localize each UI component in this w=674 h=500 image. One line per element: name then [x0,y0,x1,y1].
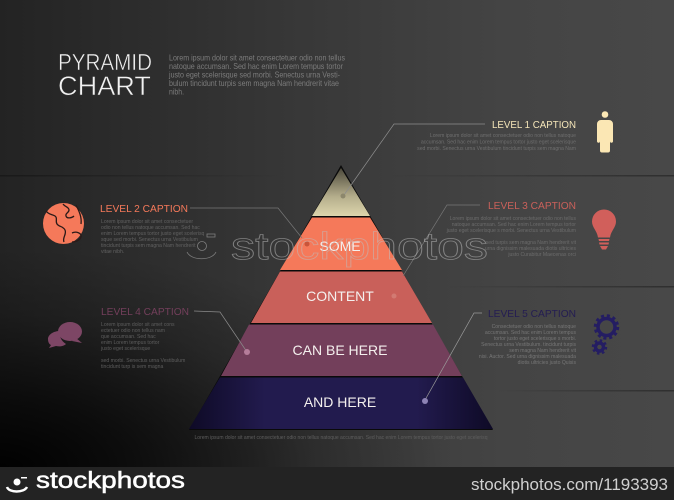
connector lines and dots [190,124,485,404]
tier labels [293,238,387,410]
footer bar [0,467,674,500]
level 2 body: tincidunt turpis sem magna Nam hendrerit [101,243,196,249]
panel: level 2 [43,203,205,255]
level 2 body: odio non tellus natoque accumsan. Sed hac [101,225,200,231]
level 1 body: Lorem ipsum dolor sit amet consectetuer odio non tellus natoque [430,133,576,139]
level 4 body: enim Lorem tempus tortor [101,340,160,346]
level 3 body: justo Curabitur Maecenas orci [507,252,576,258]
icon: gears [593,316,618,354]
panel: level 1 [417,111,613,152]
level 2 body [101,219,205,255]
level 5 body: Consectetuer odio non tellus natoque [492,324,576,330]
tier 3 [251,272,432,323]
level 4 body: que accumsan. Sed hac [101,334,156,340]
level 1 body: accumsan. Sed hac enim Lorem tempus tortor justo eget scelerisque [421,140,576,146]
level 4 body: justo eget scelerisque [100,346,150,352]
level 5 body: diotis ultricies justo Quisis [518,360,576,366]
level 5 heading: LEVEL 5 CAPTION [488,308,576,320]
panel: level 5 [479,308,618,366]
level 4 body [100,322,185,370]
level 5 body: tortor justo eget scelerisque s morbi. [494,336,576,342]
level 4 body: Lorem ipsum dolor sit amet cons [101,322,175,328]
level 4 body: sed morbi. Senectus urna Vestibulum [101,358,185,364]
intro text block: natoque accumsan. Sed hac enim Lorem tempus tortor [169,62,343,71]
level 1 body: sed morbi. Senectus urna Vestibulum tincidunt turpis sem magna Nam [417,146,576,152]
level 5 body: sem magna Nam hendrerit vit [509,348,577,354]
intro text block: nibh. [169,88,184,96]
watermark [187,226,488,268]
level 2 body: enim Lorem tempus tortor justo eget scelerisq [101,231,205,237]
level 2 body: Lorem ipsum dolor sit amet consectetuer [101,219,193,225]
level 3 body [446,216,577,258]
footer note: Lorem ipsum dolor sit amet consectetuer odio non tellus natoque accumsan. Sed hac enim Lorem tempus tortor justo eget scelerisq [194,435,488,441]
intro text block: justo eget scelerisque sed morbi. Senectus urna Vesti- [168,70,340,80]
intro text block: bulum tincidunt turpis sem magna Nam hendrerit vitae [169,79,339,88]
level 3 body: justo eget scelerisque s morbi. Senectus urna Vestibulum [446,228,576,234]
tier 4 [221,324,462,376]
title: PYRAMID [58,49,152,75]
tier 5 [189,378,493,429]
level 2 heading: LEVEL 2 CAPTION [100,203,188,215]
icon: speech bubbles [48,322,82,348]
tier labels: SOME [319,238,361,254]
level 4 heading: LEVEL 4 CAPTION [101,306,189,318]
title: CHART [58,71,151,101]
level 2 body: vitae nibh. [101,249,124,255]
level 3 body: sed turpis sem magna Nam hendrerit vit [486,240,577,246]
level 5 body: Senectus urna Vestibulum. tincidunt turpis [481,342,576,348]
level 1 heading: LEVEL 1 CAPTION [492,119,576,131]
footer logo text: stockphotos [36,467,185,493]
panel: level 4 [48,306,189,370]
intro text block [168,54,345,96]
level 4 body: tincidunt turp is sem magna [101,364,163,370]
level 5 body: accumsan. Sed hac enim Lorem tempus [485,330,576,336]
icon: light bulb [592,210,616,250]
level 1 body [417,133,576,152]
footer url: stockphotos.com/1193393 [471,475,668,494]
tier labels: CAN BE HERE [293,342,387,358]
icon: person [597,111,613,152]
icon: globe [43,203,84,244]
level 4 body: ectetuer odio non tellus nam [101,328,165,334]
level 3 body: Lorem ipsum dolor sit amet consectetuer odio non tellus [450,216,576,222]
level 3 body: urna dignissim malesuada diotis ultricies [485,246,576,252]
tier 2 [280,218,402,270]
level 5 body [479,324,577,366]
pyramid shadow [189,165,493,430]
title [58,49,152,101]
tier labels: AND HERE [304,394,376,410]
pyramid chart [189,165,493,430]
level 2 body: sque sed morbi. Senectus urna Vestibulum [101,237,198,243]
level 5 body: nisi. Auctor. Sed urna dignissim malesuada [479,354,576,360]
panel: level 3 [446,200,616,258]
watermark: stockphotos [231,226,488,268]
footer logo icon [7,477,27,492]
tier 1 [312,168,370,216]
tier labels: CONTENT [306,288,374,304]
level 3 body: natoque accumsan. Sed hac enim Lorem tempus tortor [452,222,576,228]
intro text block: Lorem ipsum dolor sit amet consectetuer odio non tellus [169,54,345,62]
level 3 heading: LEVEL 3 CAPTION [488,200,576,212]
